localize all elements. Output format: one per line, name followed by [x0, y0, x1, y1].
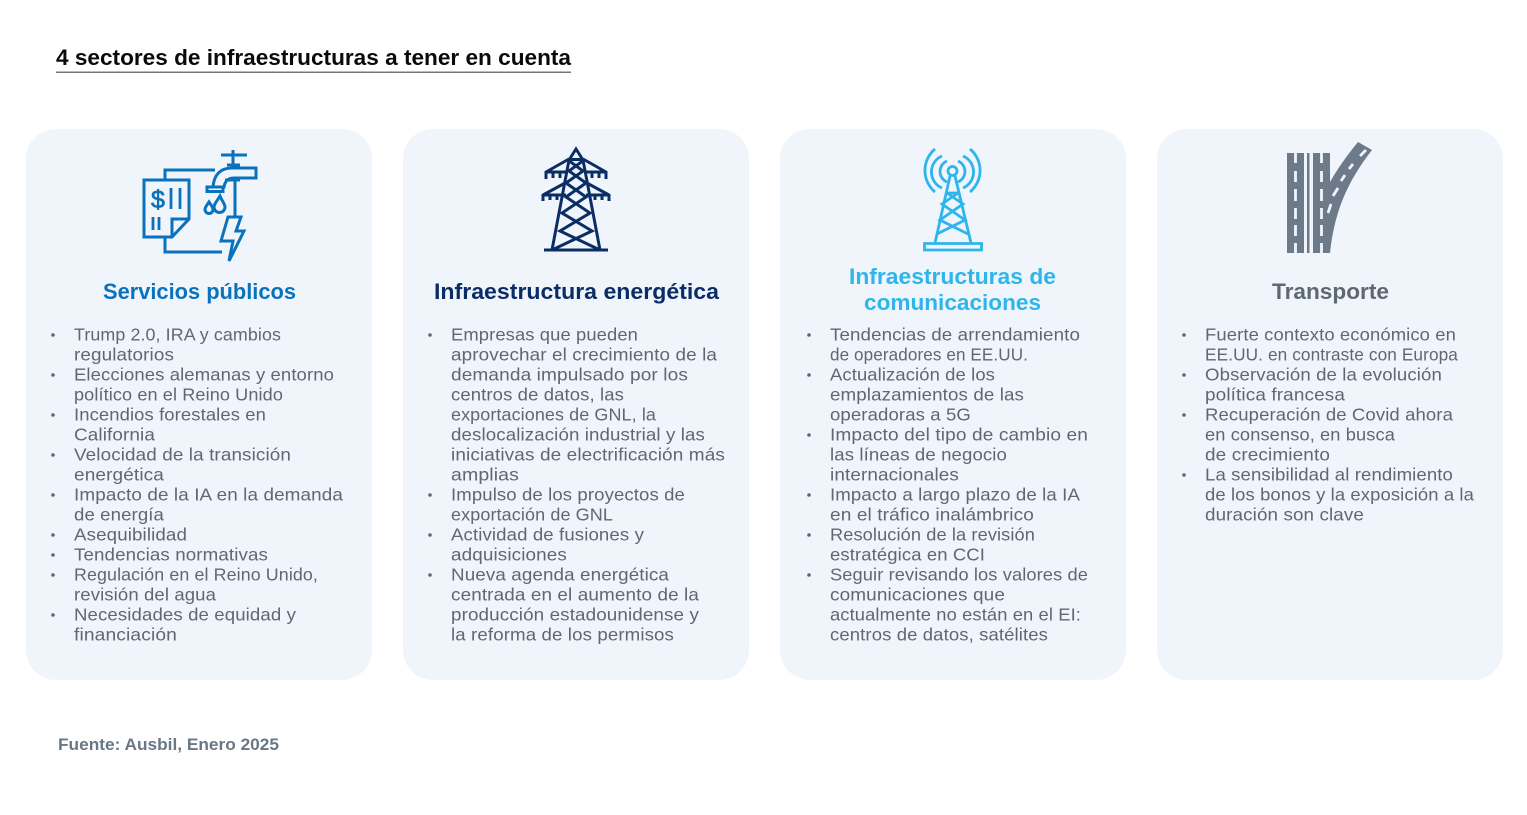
- source note: Fuente: Ausbil, Enero 2025: [58, 735, 279, 754]
- bullet list: infraestructura energética: Actividad de fusiones y: [451, 524, 644, 544]
- bullet list: servicios públicos: financiación: [74, 624, 177, 644]
- bullet list: transporte: de crecimiento: [1205, 444, 1330, 464]
- bullet list: transporte: [1182, 324, 1474, 524]
- bullet list: transporte: de los bonos y la exposición a la: [1205, 484, 1474, 504]
- bullet list: infraestructura energética: amplias: [451, 464, 519, 484]
- bullet list: infraestructura energética: exportación de GNL: [451, 504, 613, 524]
- bullet list: servicios públicos: Regulación en el Reino Unido,: [74, 564, 318, 584]
- heading: infraestructuras de comunicaciones: Infraestructuras de: [849, 264, 1056, 289]
- bullet list: infraestructura energética: demanda impulsado por los: [451, 364, 688, 384]
- bullet list: servicios públicos: Necesidades de equidad y: [74, 604, 296, 624]
- heading: infraestructuras de comunicaciones: [849, 264, 1056, 315]
- heading: infraestructuras de comunicaciones: comunicaciones: [864, 290, 1041, 315]
- panel: transporte: [1157, 129, 1503, 680]
- bullet list: infraestructura energética: producción estadounidense y: [451, 604, 699, 624]
- bullet list: infraestructuras de comunicaciones: Resolución de la revisión: [830, 524, 1035, 544]
- bullet list: infraestructuras de comunicaciones: Seguir revisando los valores de: [830, 564, 1088, 584]
- bullet list: servicios públicos: revisión del agua: [74, 584, 216, 604]
- bullet list: infraestructuras de comunicaciones: las líneas de negocio: [830, 444, 1007, 464]
- bullet list: infraestructuras de comunicaciones: emplazamientos de las: [830, 384, 1024, 404]
- bullet list: infraestructura energética: centrada en el aumento de la: [451, 584, 699, 604]
- bullet list: transporte: La sensibilidad al rendimiento: [1205, 464, 1453, 484]
- bullet list: servicios públicos: de energía: [74, 504, 164, 524]
- icon: transmission tower: [543, 149, 609, 250]
- bullet list: infraestructura energética: centros de datos, las: [451, 384, 624, 404]
- bullet list: infraestructura energética: deslocalización industrial y las: [451, 424, 705, 444]
- bullet list: servicios públicos: California: [74, 424, 155, 444]
- heading: transporte: Transporte: [1272, 279, 1389, 304]
- icon: forking road: [1287, 142, 1372, 253]
- bullet list: infraestructura energética: Empresas que pueden: [451, 324, 638, 344]
- bullet list: infraestructura energética: [428, 324, 725, 644]
- panel: servicios públicos: [26, 129, 372, 680]
- bullet list: transporte: Fuerte contexto económico en: [1205, 324, 1456, 344]
- panel: infraestructura energética: [403, 129, 749, 680]
- bullet list: infraestructuras de comunicaciones: Tendencias de arrendamiento: [830, 324, 1080, 344]
- bullet list: servicios públicos: Velocidad de la transición: [74, 444, 291, 464]
- bullet list: infraestructuras de comunicaciones: estratégica en CCI: [830, 544, 985, 564]
- icon: bill, faucet and lightning: [144, 150, 256, 261]
- bullet list: infraestructura energética: iniciativas de electrificación más: [451, 444, 725, 464]
- bullet list: servicios públicos: Impacto de la IA en la demanda: [74, 484, 343, 504]
- bullet list: transporte: Recuperación de Covid ahora: [1205, 404, 1453, 424]
- bullet list: infraestructuras de comunicaciones: de operadores en EE.UU.: [830, 344, 1028, 364]
- bullet list: transporte: Observación de la evolución: [1205, 364, 1442, 384]
- bullet list: servicios públicos: Elecciones alemanas y entorno: [74, 364, 334, 384]
- bullet list: transporte: duración son clave: [1205, 504, 1364, 524]
- bullet list: servicios públicos: [51, 324, 343, 644]
- bullet list: infraestructuras de comunicaciones: Impacto del tipo de cambio en: [830, 424, 1088, 444]
- bullet list: transporte: EE.UU. en contraste con Europa: [1205, 344, 1458, 364]
- bullet list: infraestructuras de comunicaciones: Actualización de los: [830, 364, 995, 384]
- icon: radio antenna tower: [924, 149, 982, 250]
- bullet list: infraestructuras de comunicaciones: comunicaciones que: [830, 584, 1005, 604]
- bullet list: servicios públicos: Trump 2.0, IRA y cambios: [74, 324, 281, 344]
- bullet list: servicios públicos: Tendencias normativas: [74, 544, 268, 564]
- bullet list: infraestructura energética: Nueva agenda energética: [451, 564, 669, 584]
- bullet list: infraestructura energética: adquisiciones: [451, 544, 567, 564]
- bullet list: servicios públicos: energética: [74, 464, 164, 484]
- bullet list: infraestructuras de comunicaciones: internacionales: [830, 464, 959, 484]
- title: 4 sectores de infraestructuras a tener en cuenta: [56, 45, 572, 70]
- bullet list: transporte: política francesa: [1205, 384, 1345, 404]
- bullet list: servicios públicos: regulatorios: [74, 344, 174, 364]
- bullet list: infraestructura energética: la reforma de los permisos: [451, 624, 674, 644]
- bullet list: infraestructura energética: Impulso de los proyectos de: [451, 484, 685, 504]
- heading: infraestructura energética: Infraestructura energética: [434, 279, 720, 304]
- bullet list: infraestructura energética: aprovechar el crecimiento de la: [451, 344, 717, 364]
- bullet list: servicios públicos: político en el Reino Unido: [74, 384, 283, 404]
- bullet list: servicios públicos: Incendios forestales en: [74, 404, 266, 424]
- bullet list: transporte: en consenso, en busca: [1205, 424, 1395, 444]
- bullet list: infraestructura energética: exportaciones de GNL, la: [451, 404, 656, 424]
- heading: servicios públicos: Servicios públicos: [103, 279, 296, 304]
- bullet list: infraestructuras de comunicaciones: operadoras a 5G: [830, 404, 971, 424]
- icon: bill, faucet and lightning: $: [151, 186, 165, 214]
- bullet list: infraestructuras de comunicaciones: centros de datos, satélites: [830, 624, 1048, 644]
- bullet list: infraestructuras de comunicaciones: actualmente no están en el EI:: [830, 604, 1081, 624]
- bullet list: infraestructuras de comunicaciones: [807, 324, 1088, 644]
- panel: infraestructuras de comunicaciones: [780, 129, 1126, 680]
- bullet list: servicios públicos: Asequibilidad: [74, 524, 187, 544]
- bullet list: infraestructuras de comunicaciones: Impacto a largo plazo de la IA: [830, 484, 1080, 504]
- bullet list: infraestructuras de comunicaciones: en el tráfico inalámbrico: [830, 504, 1034, 524]
